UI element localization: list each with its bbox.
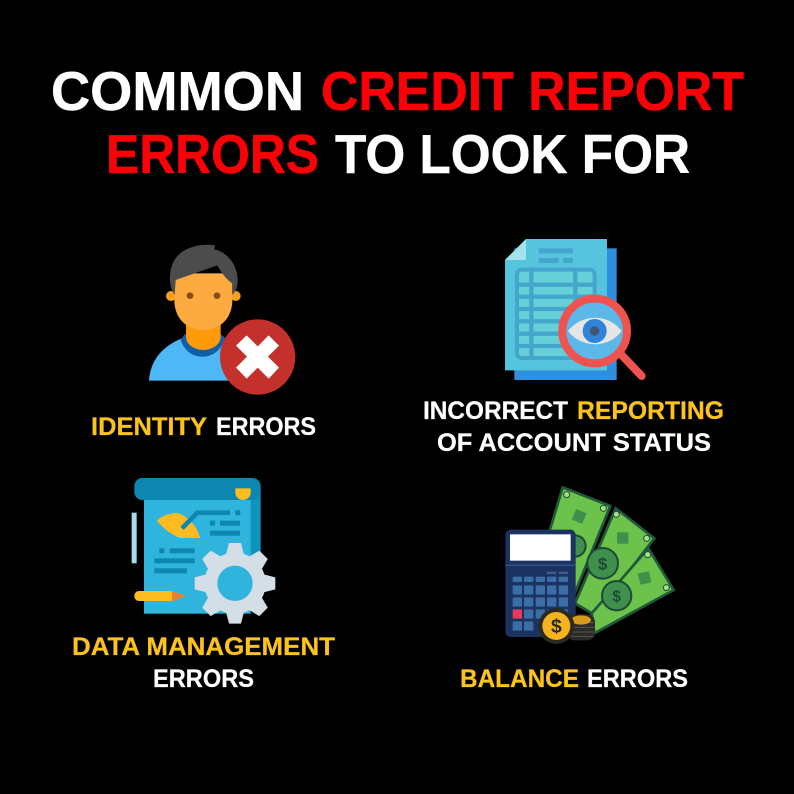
icon: person with red cross (149, 245, 295, 395)
icon: plan sheet with gear (132, 478, 275, 624)
label: identity errors: ERRORS (216, 413, 316, 441)
panel: identity errors (91, 245, 316, 441)
label: balance errors: ERRORS (587, 665, 688, 693)
label: balance errors (460, 665, 688, 693)
icon: calculator, banknotes and coins: $ (598, 554, 608, 573)
panel: data management (72, 478, 335, 693)
icon: calculator, banknotes and coins: $ (551, 617, 562, 638)
title: ERRORS (106, 123, 319, 185)
title: CREDIT REPORT (321, 60, 744, 122)
label: data management errors (72, 633, 335, 693)
label: incorrect reporting of account status: REPORTING (577, 397, 724, 425)
title (51, 60, 744, 185)
label: data management errors: ERRORS (153, 665, 254, 693)
label: incorrect reporting of account status: INCORRECT (423, 397, 568, 425)
label: identity errors: IDENTITY (91, 413, 207, 441)
label: identity errors (91, 413, 316, 441)
panel: balance errors (460, 487, 688, 693)
label: incorrect reporting of account status: OF ACCOUNT STATUS (437, 429, 711, 457)
title: COMMON (51, 60, 304, 122)
title: TO LOOK FOR (335, 123, 690, 185)
label: balance errors: BALANCE (460, 665, 579, 693)
icon: calculator, banknotes and coins: $ (612, 588, 621, 605)
icon: calculator, banknotes and coins (505, 487, 674, 644)
label: data management errors: DATA MANAGEMENT (72, 633, 335, 661)
label: incorrect reporting of account status (423, 397, 724, 457)
icon: document with magnifier (505, 239, 642, 380)
panel: incorrect reporting (423, 239, 724, 457)
